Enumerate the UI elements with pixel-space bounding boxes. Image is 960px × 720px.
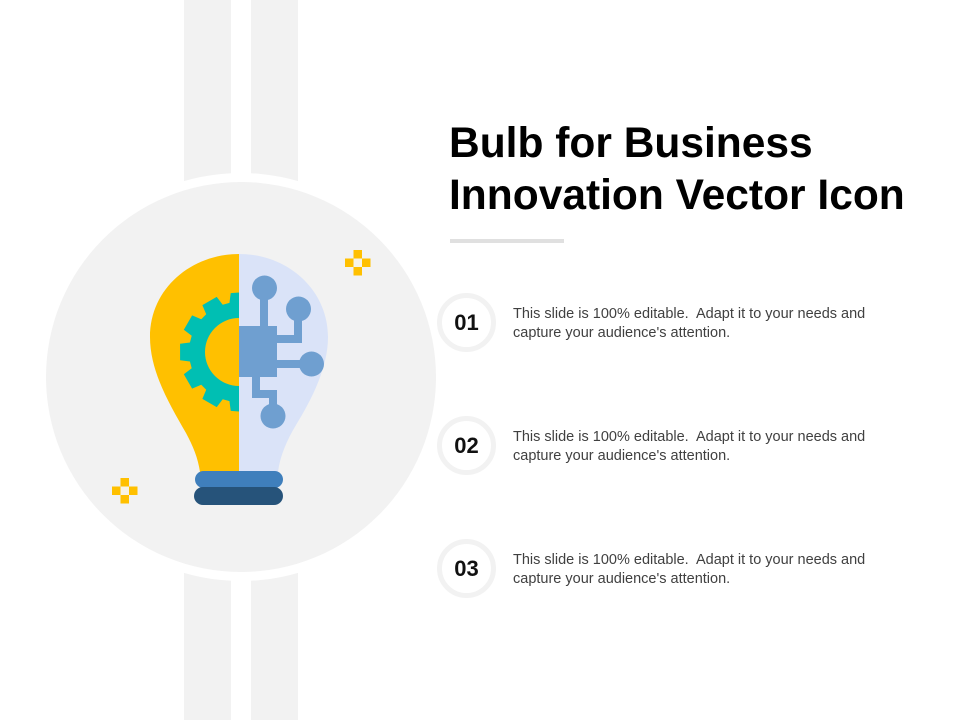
title: Innovation Vector Icon	[449, 172, 905, 219]
number badge 03: 03	[454, 556, 479, 581]
number badge 01	[437, 293, 496, 352]
number badge 01: 01	[454, 310, 479, 335]
list item 01	[437, 293, 865, 352]
icon: sparkle top right	[345, 250, 370, 276]
number badge 02	[437, 416, 496, 475]
title: Bulb for Business	[449, 120, 813, 167]
text block 03: This slide is 100% editable. Adapt it to your needs and capture your audience's attention.	[513, 552, 865, 586]
list item 03	[437, 539, 865, 598]
icon: sparkle bottom left	[112, 478, 138, 504]
text block 01: This slide is 100% editable. Adapt it to your needs and capture your audience's attention.	[513, 306, 865, 340]
title	[449, 120, 905, 219]
number badge 02: 02	[454, 433, 479, 458]
list item 02	[437, 416, 865, 475]
divider	[450, 239, 564, 243]
text block 02: This slide is 100% editable. Adapt it to your needs and capture your audience's attention.	[513, 429, 865, 464]
number badge 03	[437, 539, 496, 598]
